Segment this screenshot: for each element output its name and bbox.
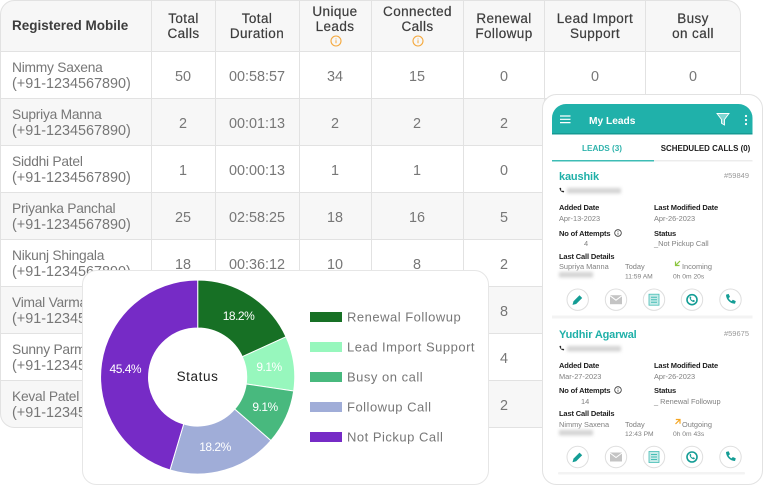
table rows: (+91-1234567890) [12, 76, 131, 92]
table header: Unique [312, 4, 358, 19]
lead card: Yudhir Agarwal: Yudhir Agarwal [559, 329, 637, 341]
table rows: Siddhi Patel [12, 154, 83, 169]
donut value labels: 9.1% [252, 400, 279, 414]
table header: Support [570, 26, 620, 41]
lead card: kaushik: 0h 0m 20s [673, 274, 705, 280]
donut chart [101, 280, 295, 474]
lead card: Yudhir Agarwal: Added Date [559, 361, 599, 370]
table rows: (+91-1234567890) [12, 358, 131, 374]
lead card: kaushik: Status [654, 229, 676, 238]
table rows: Keval Patel [12, 389, 79, 404]
panel: status chart [82, 270, 488, 484]
lead card: Yudhir Agarwal: Last Modified Date [654, 361, 718, 370]
table header: Busy [677, 11, 709, 26]
lead card: kaushik: Last Call Details [559, 252, 614, 261]
lead card: kaushik: 4 [584, 239, 588, 248]
app header bar [552, 104, 752, 134]
table rows: 0 [689, 69, 697, 85]
table rows: Sunny Parmar [12, 342, 98, 357]
table rows: (+91-1234567890) [12, 264, 131, 280]
table rows: 8 [500, 304, 508, 320]
table header: Calls [167, 26, 200, 41]
donut value labels: 18.2% [223, 309, 255, 323]
table rows: 18 [327, 210, 343, 226]
lead card: kaushik: Incoming [682, 262, 712, 271]
lead card: kaushik: #59849 [724, 171, 749, 180]
table rows: (+91-1234567890) [12, 405, 131, 421]
tabs: SCHEDULED CALLS (0) [661, 144, 751, 153]
chart legend: Busy on call [347, 370, 423, 384]
table rows: 2 [331, 116, 339, 132]
table rows: 0 [500, 69, 508, 85]
lead card: Yudhir Agarwal: No of Attempts [559, 386, 610, 395]
lead card: Yudhir Agarwal: 12:43 PM [625, 431, 654, 438]
table rows: 00:36:12 [229, 257, 285, 273]
table rows: Nimmy Saxena [12, 60, 103, 75]
table header: Lead Import [557, 11, 633, 26]
chart legend [310, 310, 475, 444]
lead card: kaushik: _Not Pickup Call [653, 239, 709, 248]
table rows: 00:58:57 [229, 69, 285, 85]
lead card: Yudhir Agarwal: Mar-27-2023 [559, 372, 601, 381]
table rows: 15 [409, 69, 425, 85]
donut value labels: 45.4% [110, 362, 142, 376]
lead card: Yudhir Agarwal: Today [625, 420, 645, 429]
table header: Connected [383, 4, 452, 19]
table rows: 16 [409, 210, 425, 226]
tabs: LEADS (3) [582, 144, 622, 153]
lead card: kaushik: Today [625, 262, 645, 271]
table rows: 34 [327, 69, 343, 85]
table rows: 1 [413, 163, 421, 179]
lead card: Yudhir Agarwal: Outgoing [682, 420, 712, 429]
app header bar: My Leads [589, 116, 636, 127]
lead card: kaushik: Added Date [559, 203, 599, 212]
lead card: kaushik: kaushik [559, 171, 600, 183]
table rows: 1 [179, 163, 187, 179]
lead card: Yudhir Agarwal: _ Renewal Followup [653, 397, 721, 406]
table rows: (+91-1234567890) [12, 123, 131, 139]
table rows: 2 [413, 116, 421, 132]
action icons: kaushik [567, 289, 741, 310]
lead card: Yudhir Agarwal: Status [654, 386, 676, 395]
lead card: Yudhir Agarwal: Nimmy Saxena [559, 420, 610, 429]
table rows: 0 [591, 69, 599, 85]
donut centre label: Status [177, 369, 218, 384]
lead card: kaushik: 11:59 AM [625, 274, 653, 280]
table header: Total [242, 11, 272, 26]
donut value labels: 9.1% [256, 360, 283, 374]
table header: Renewal [476, 11, 532, 26]
table rows: 18 [175, 257, 191, 273]
table header: Registered Mobile [12, 18, 129, 33]
lead card: Yudhir Agarwal: 0h 0m 43s [673, 431, 705, 438]
lead card: kaushik: No of Attempts [559, 229, 610, 238]
action icons: Yudhir Agarwal [567, 446, 741, 468]
table rows: 0 [500, 163, 508, 179]
table rows: 2 [500, 116, 508, 132]
table rows: Priyanka Panchal [12, 201, 116, 216]
table rows: Supriya Manna [12, 107, 102, 122]
lead card: Yudhir Agarwal: #59675 [724, 329, 749, 338]
table rows: 5 [500, 210, 508, 226]
panel: phone leads screen [542, 94, 762, 484]
table rows: (+91-1234567890) [12, 217, 131, 233]
donut value labels [110, 309, 283, 454]
lead card: Yudhir Agarwal [559, 329, 749, 438]
table rows [12, 60, 697, 421]
table rows: 2 [500, 398, 508, 414]
table rows: Vimal Varma [12, 295, 88, 310]
lead card: kaushik: Apr-13-2023 [559, 214, 600, 223]
table header: Calls [401, 19, 434, 34]
table rows: 02:58:25 [229, 210, 285, 226]
table rows: 4 [500, 351, 508, 367]
table header: on call [672, 26, 714, 41]
table rows: Nikunj Shingala [12, 248, 105, 263]
table rows: 00:01:13 [229, 116, 285, 132]
chart legend: Renewal Followup [347, 310, 461, 324]
table header: Duration [230, 26, 284, 41]
lead card: kaushik: Supriya Manna [559, 262, 610, 271]
lead card: Yudhir Agarwal: 14 [581, 397, 589, 406]
table rows: 1 [331, 163, 339, 179]
table header: Leads [316, 19, 354, 34]
chart legend: Followup Call [347, 400, 432, 414]
table rows: (+91-1234567890) [12, 170, 131, 186]
table rows: 2 [179, 116, 187, 132]
table rows: 00:00:13 [229, 163, 285, 179]
table header: Total [168, 11, 199, 26]
tabs [552, 144, 752, 162]
lead card: kaushik: Last Modified Date [654, 203, 718, 212]
donut value labels: 18.2% [199, 440, 232, 454]
table rows: 10 [327, 257, 343, 273]
lead card: Yudhir Agarwal: Last Call Details [559, 409, 614, 418]
lead card: Yudhir Agarwal: Apr-26-2023 [654, 372, 695, 381]
table rows: 25 [175, 210, 191, 226]
lead card: kaushik [559, 171, 749, 280]
table rows: 50 [175, 69, 191, 85]
table rows: 8 [413, 257, 421, 273]
table rows: 2 [500, 257, 508, 273]
table header [12, 4, 714, 46]
lead card: kaushik: Apr-26-2023 [654, 214, 695, 223]
table header: Followup [475, 26, 533, 41]
chart legend: Not Pickup Call [347, 430, 443, 444]
table rows: (+91-1234567890) [12, 311, 131, 327]
chart legend: Lead Import Support [347, 340, 475, 354]
